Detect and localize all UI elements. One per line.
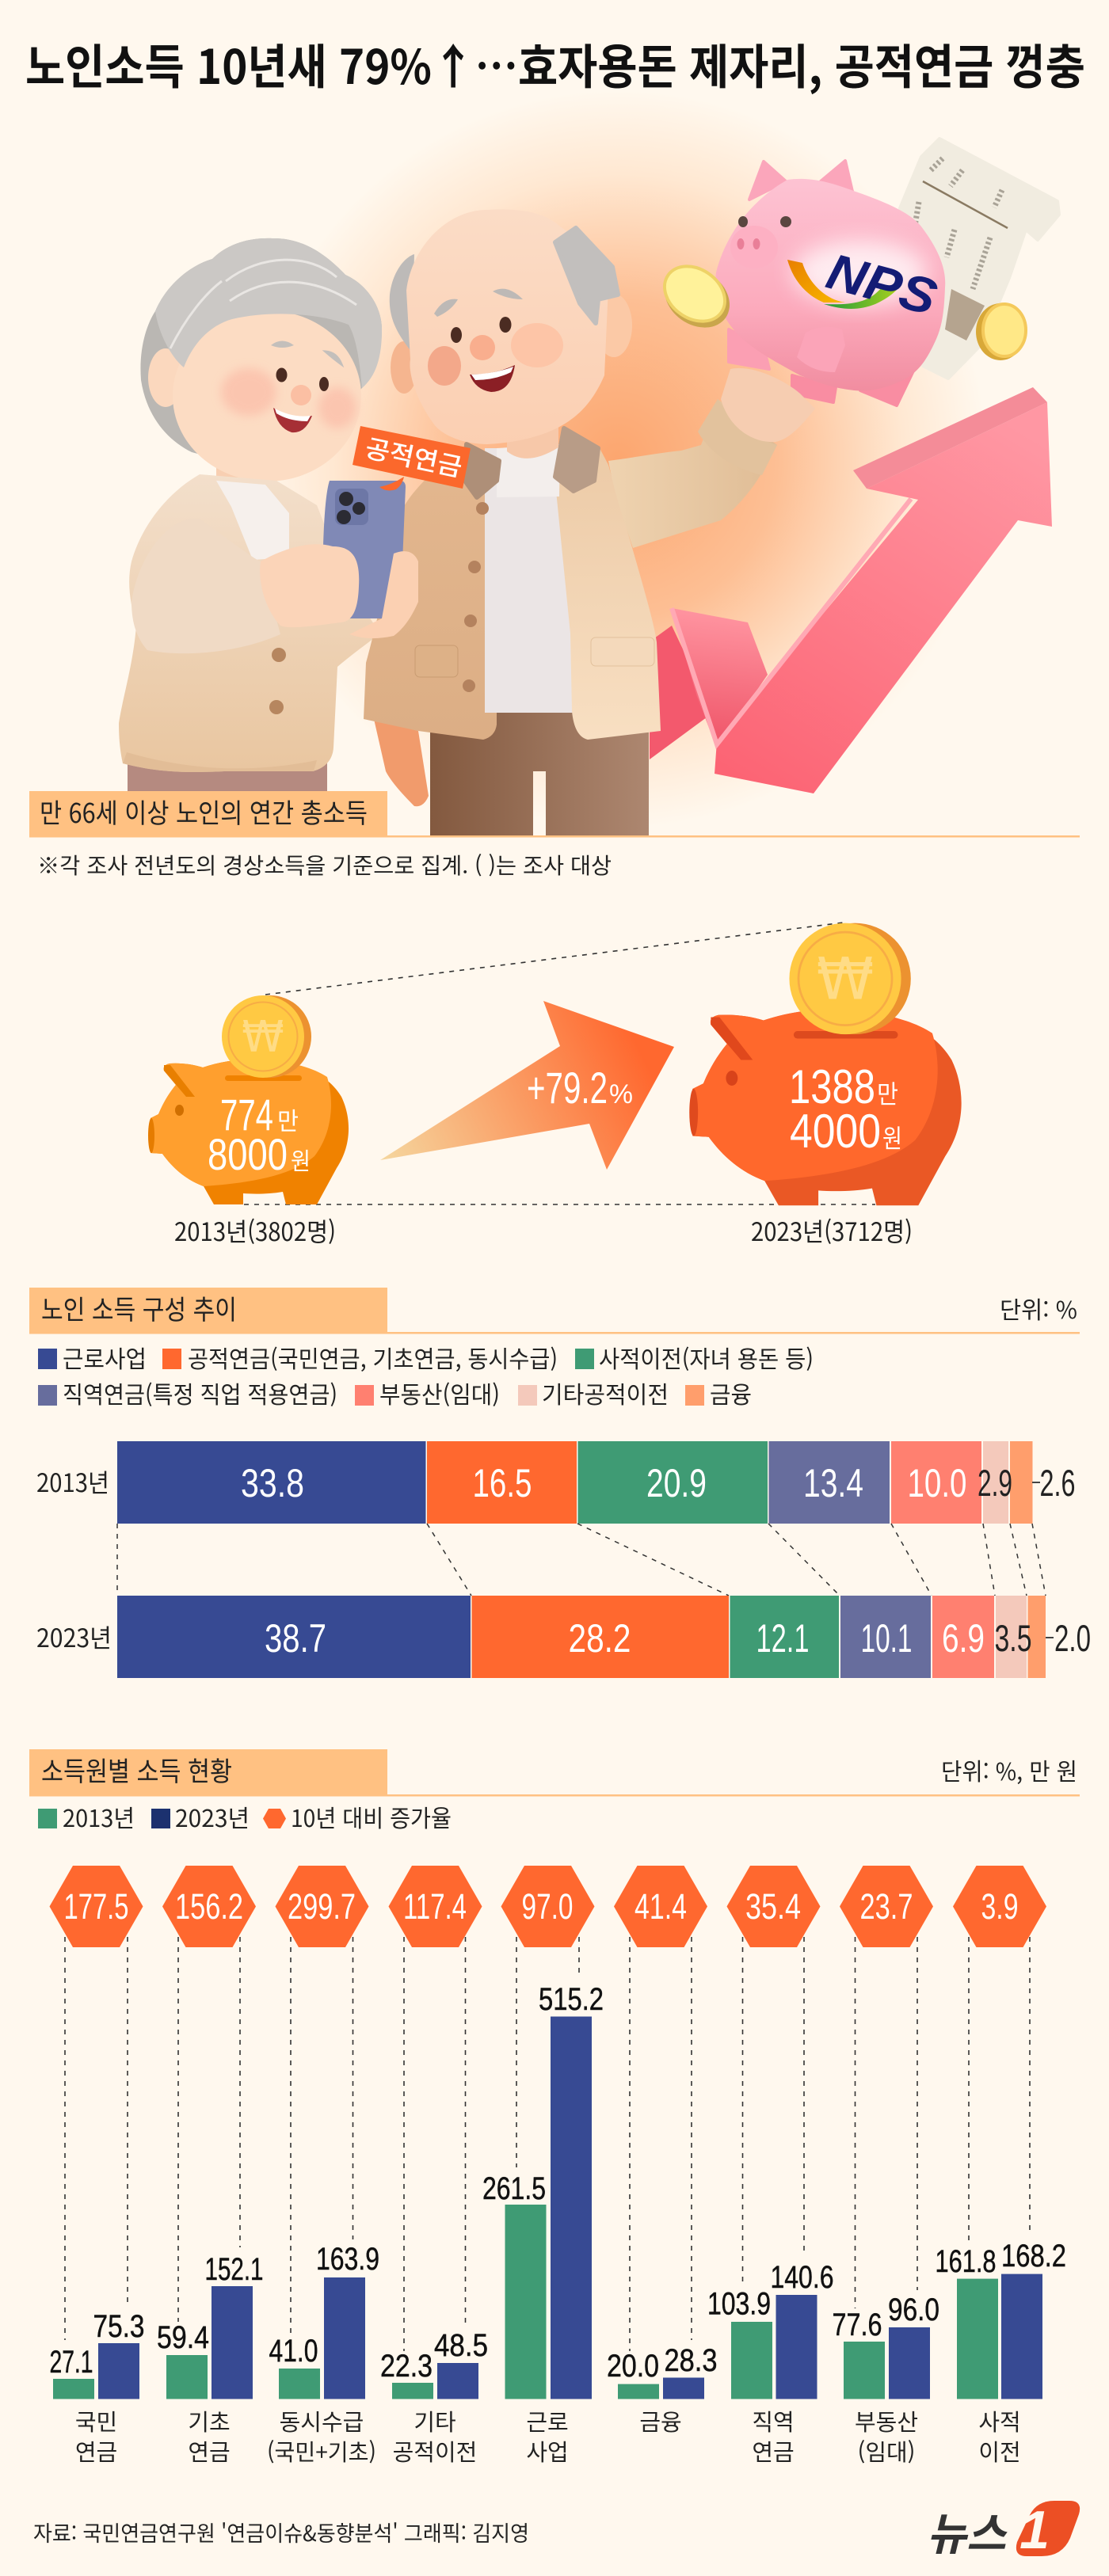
man [364, 209, 815, 836]
bar values: 161.8 [935, 2244, 997, 2279]
note: ※각 조사 전년도의 경상소득을 기준으로 집계. ( )는 조사 대상 [37, 849, 612, 881]
bar values: 77.6 [832, 2308, 882, 2342]
stacked bar 2013: 20.9 [646, 1461, 707, 1505]
legend: by source: 2023년 [175, 1799, 250, 1834]
coin [222, 995, 311, 1078]
section header: by source: 소득원별 소득 현황 [41, 1750, 232, 1789]
stacked bar 2013: 2013년 [36, 1463, 109, 1500]
hexagon badges: 10-year growth rate: 299.7 [288, 1886, 356, 1927]
category labels: 직역 [752, 2404, 795, 2437]
amount 2013: 원 [291, 1142, 311, 1177]
bar values: 27.1 [49, 2345, 93, 2380]
hexagon badges: 10-year growth rate [49, 1866, 1046, 1947]
amount 2013: 만 [277, 1102, 299, 1137]
legend: composition: 공적연금(국민연금, 기초연금, 동시수급) [188, 1340, 558, 1375]
category labels: 기초 [188, 2404, 231, 2437]
stacked bar 2023: 12.1 [756, 1616, 810, 1661]
logo: News1 [927, 2499, 1080, 2563]
bar values: 163.9 [316, 2242, 379, 2277]
hexagon badges: 10-year growth rate: 41.4 [635, 1886, 687, 1927]
amount 2023 [789, 1060, 902, 1158]
amount 2013: 8000 [208, 1129, 288, 1179]
source credit: 자료: 국민연금연구원 '연금이슈&동향분석' 그래픽: 김지영 [33, 2517, 529, 2547]
logo: News1: 뉴스 [927, 2499, 1008, 2563]
logo: News1: 1 [1019, 2500, 1050, 2560]
year labels: 2023년(3712명) [751, 1212, 913, 1249]
stacked bar 2013 [36, 1441, 1076, 1524]
piggy bank 2023: ₩ [817, 946, 874, 1013]
coins [653, 255, 1026, 360]
arrow: rising pink arrow [650, 387, 1052, 793]
stacked bar 2023: 10.1 [860, 1616, 913, 1661]
category labels: 근로 [526, 2404, 569, 2437]
legend: composition: 사적이전(자녀 용돈 등) [599, 1340, 814, 1375]
category labels: 연금 [752, 2434, 795, 2468]
category labels: 사적 [978, 2404, 1021, 2437]
bar values: 261.5 [482, 2171, 546, 2206]
section header: annual income: 만 66세 이상 노인의 연간 총소득 [40, 792, 368, 831]
bar values: 140.6 [770, 2260, 833, 2295]
bar values: 48.5 [434, 2328, 488, 2363]
stacked bar 2023: 3.5 [995, 1617, 1031, 1659]
stacked bar 2023: 38.7 [265, 1616, 326, 1661]
stacked bar 2013: 2.9 [978, 1462, 1012, 1504]
callout: 공적연금: 공적연금 [362, 428, 466, 485]
bar values: 103.9 [707, 2287, 771, 2322]
bar values: 22.3 [380, 2349, 433, 2384]
bar values: 20.0 [607, 2349, 659, 2384]
category labels: 연금 [188, 2434, 231, 2468]
stacked bar 2023 [36, 1596, 1091, 1678]
amount 2023: 4000 [790, 1105, 881, 1158]
stacked bar 2013: 2.6 [1039, 1462, 1076, 1504]
hexagon badges: 10-year growth rate: 97.0 [521, 1886, 574, 1927]
bar values: 515.2 [539, 1982, 604, 2017]
receipt [900, 139, 1059, 379]
category labels: (임대) [858, 2434, 915, 2468]
piggy bank 2023 [689, 923, 962, 1205]
category labels: 국민 [75, 2404, 117, 2437]
legend: composition [38, 1340, 814, 1410]
legend: composition: 부동산(임대) [379, 1376, 500, 1410]
bar values: 59.4 [157, 2320, 209, 2355]
hero illustration [119, 87, 1059, 836]
category labels: (국민+기초) [267, 2434, 376, 2468]
legend: composition: 직역연금(특정 직업 적용연금) [63, 1376, 337, 1410]
coin: ₩ [242, 1012, 284, 1062]
category labels: 사업 [526, 2434, 569, 2468]
stacked bar 2013: 33.8 [241, 1461, 304, 1505]
stacked bar 2023: 6.9 [942, 1616, 985, 1661]
section header: by source [29, 1749, 1080, 1796]
legend: composition: 근로사업 [63, 1340, 147, 1375]
category labels: 동시수급 [280, 2404, 364, 2437]
category labels: 공적이전 [393, 2434, 477, 2468]
legend: by source [38, 1799, 452, 1834]
hands and phone [260, 481, 418, 638]
amount 2013 [208, 1090, 311, 1179]
bar values: 152.1 [204, 2252, 263, 2287]
legend: by source: 2013년 [63, 1799, 135, 1834]
stacked bar 2023: 28.2 [569, 1616, 631, 1661]
section header: composition: 노인 소득 구성 추이 [41, 1288, 237, 1327]
dotted guide lines [244, 923, 875, 1204]
hexagon badges: 10-year growth rate: 156.2 [175, 1886, 243, 1927]
piggy bank 2013 [148, 995, 349, 1204]
stacked bar 2013: 16.5 [472, 1461, 532, 1505]
legend: composition: 금융 [710, 1376, 752, 1410]
bar chart: income by source [49, 1982, 1066, 2468]
amount 2023: 원 [882, 1119, 902, 1155]
stacked bar 2023: 2023년 [36, 1619, 112, 1655]
bar values: 96.0 [888, 2293, 939, 2327]
legend: by source: 10년 대비 증가율 [291, 1799, 452, 1834]
category labels [75, 2404, 1021, 2468]
amount 2023: 1388 [789, 1060, 875, 1113]
hexagon badges: 10-year growth rate: 23.7 [860, 1886, 913, 1927]
growth arrow: +79.2 [527, 1063, 608, 1113]
hexagon badges: 10-year growth rate: 35.4 [745, 1886, 801, 1927]
bar values [49, 1982, 1066, 2384]
section header: by source: 단위: %, 만 원 [941, 1752, 1077, 1787]
amount 2023: 만 [877, 1075, 898, 1111]
category labels: 부동산 [855, 2404, 918, 2437]
stacked bar 2013: 10.0 [908, 1461, 966, 1505]
stacked bar 2013: 13.4 [803, 1461, 863, 1505]
growth arrow: % [609, 1079, 633, 1109]
category labels: 기타 [413, 2404, 456, 2437]
bar values: 41.0 [269, 2334, 318, 2369]
dashed leader lines [65, 1937, 1030, 2351]
category labels: 금융 [639, 2404, 682, 2437]
year labels: 2013년(3802명) [174, 1212, 336, 1249]
connector lines [117, 1524, 1046, 1596]
bar values: 75.3 [93, 2309, 144, 2344]
category labels: 이전 [978, 2434, 1021, 2468]
amount 2013: 774 [220, 1090, 273, 1140]
section header: composition [29, 1288, 1080, 1334]
section header: annual income [29, 791, 1080, 838]
stacked bar 2023: 2.0 [1054, 1617, 1091, 1659]
woman [119, 238, 382, 792]
year labels [174, 1212, 913, 1249]
hexagon badges: 10-year growth rate: 3.9 [981, 1886, 1019, 1927]
bar values: 28.3 [664, 2343, 718, 2378]
bar values: 168.2 [1001, 2239, 1066, 2274]
hexagon badges: 10-year growth rate: 117.4 [403, 1886, 467, 1927]
section header: composition: 단위: % [1000, 1291, 1077, 1326]
hexagon badges: 10-year growth rate: 177.5 [63, 1886, 128, 1927]
piggy bank with NPS logo [715, 161, 945, 405]
NPS logo: NPS [821, 242, 943, 326]
growth arrow [380, 1001, 674, 1170]
legend: composition: 기타공적이전 [542, 1376, 669, 1410]
category labels: 연금 [75, 2434, 117, 2468]
